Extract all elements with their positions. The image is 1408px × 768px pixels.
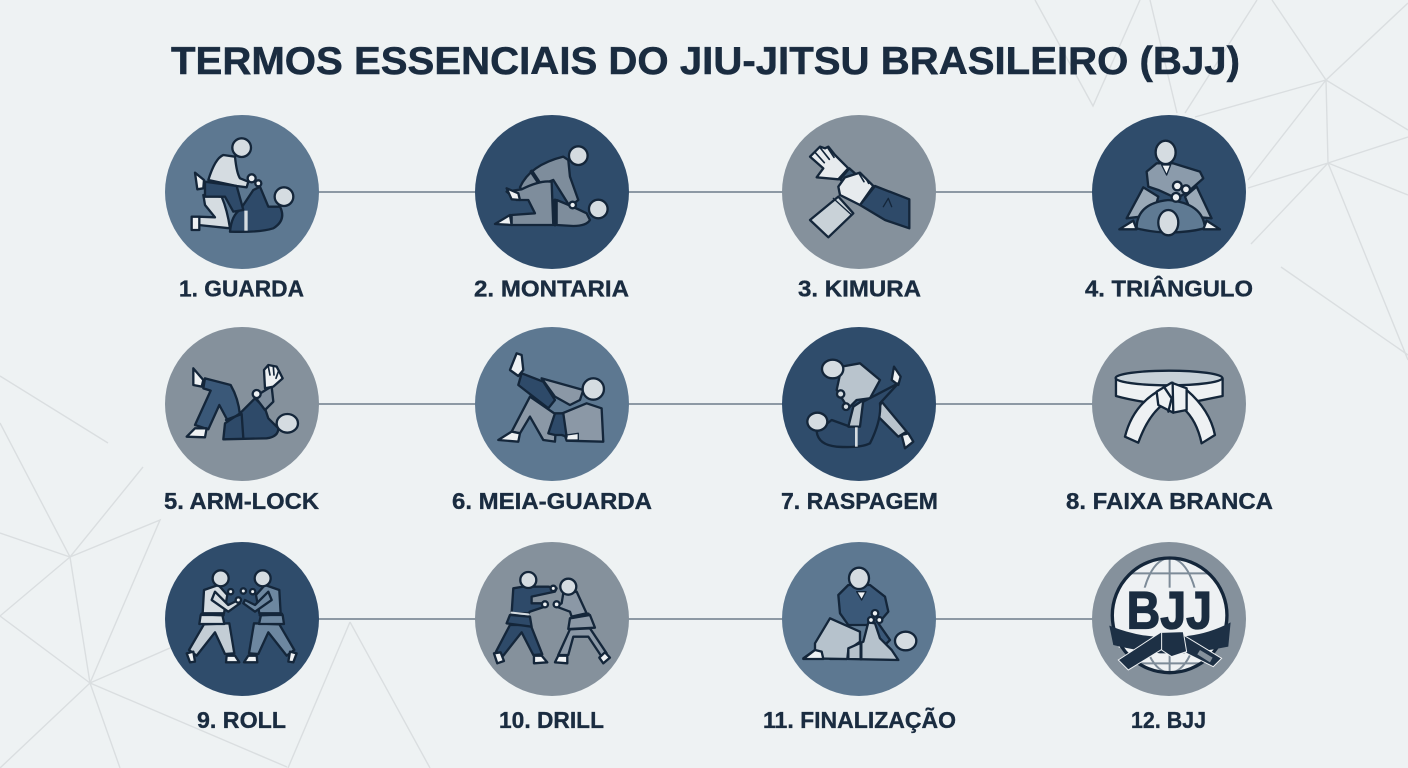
label: faixa branca: 8. FAIXA BRANCA bbox=[1066, 488, 1273, 514]
panel: triangulo bbox=[1085, 115, 1253, 302]
icon: finalizacao bbox=[803, 568, 916, 660]
icon: bjj emblem bbox=[1109, 558, 1231, 673]
circle: triangulo bbox=[1092, 115, 1246, 269]
label: montaria: 2. MONTARIA bbox=[474, 276, 629, 302]
icon: meia-guarda bbox=[498, 353, 604, 442]
icon: triangulo bbox=[1119, 141, 1220, 235]
circle: guarda bbox=[165, 115, 319, 269]
label: bjj: 12. BJJ bbox=[1131, 707, 1206, 733]
circle: bjj bbox=[1092, 542, 1246, 696]
circle: raspagem bbox=[782, 327, 936, 481]
icon: drill bbox=[494, 572, 610, 663]
circle: kimura bbox=[782, 115, 936, 269]
title: TERMOS ESSENCIAIS DO JIU-JITSU BRASILEIRO (BJJ) bbox=[171, 40, 1240, 83]
panel: montaria bbox=[474, 115, 629, 302]
icon: roll bbox=[187, 570, 297, 662]
circle: finalizacao bbox=[782, 542, 936, 696]
panel: kimura bbox=[782, 115, 936, 302]
panel: finalizacao bbox=[763, 542, 956, 733]
circle: faixa branca bbox=[1092, 327, 1246, 481]
panel: arm-lock bbox=[164, 327, 319, 514]
label: roll: 9. ROLL bbox=[197, 707, 286, 733]
label: triangulo: 4. TRIÂNGULO bbox=[1085, 274, 1253, 302]
label: arm-lock: 5. ARM-LOCK bbox=[164, 488, 319, 514]
panel: meia-guarda bbox=[452, 327, 652, 514]
panel: drill bbox=[475, 542, 629, 733]
circle: roll bbox=[165, 542, 319, 696]
circle: drill bbox=[475, 542, 629, 696]
icon: arm-lock bbox=[187, 365, 298, 439]
icon: raspagem bbox=[807, 360, 913, 448]
icon: bjj emblem: BJJ bbox=[1127, 581, 1212, 640]
panel: faixa branca bbox=[1066, 327, 1273, 514]
circle: montaria bbox=[475, 115, 629, 269]
panel: guarda bbox=[165, 115, 319, 302]
connector lines bbox=[318, 192, 1093, 619]
panel: roll bbox=[165, 542, 319, 733]
label: drill: 10. DRILL bbox=[499, 707, 604, 733]
label: kimura: 3. KIMURA bbox=[798, 276, 921, 302]
icon: kimura bbox=[810, 147, 909, 237]
panel: raspagem bbox=[781, 327, 938, 514]
circle: meia-guarda bbox=[475, 327, 629, 481]
icon: montaria bbox=[495, 146, 608, 226]
circle: arm-lock bbox=[165, 327, 319, 481]
label: raspagem: 7. RASPAGEM bbox=[781, 488, 938, 514]
panel: bjj bbox=[1092, 542, 1246, 733]
label: guarda: 1. GUARDA bbox=[179, 276, 304, 302]
label: meia-guarda: 6. MEIA-GUARDA bbox=[452, 488, 652, 514]
icon: guarda bbox=[192, 138, 293, 232]
label: finalizacao: 11. FINALIZAÇÃO bbox=[763, 706, 956, 733]
icon: faixa branca bbox=[1116, 371, 1223, 443]
